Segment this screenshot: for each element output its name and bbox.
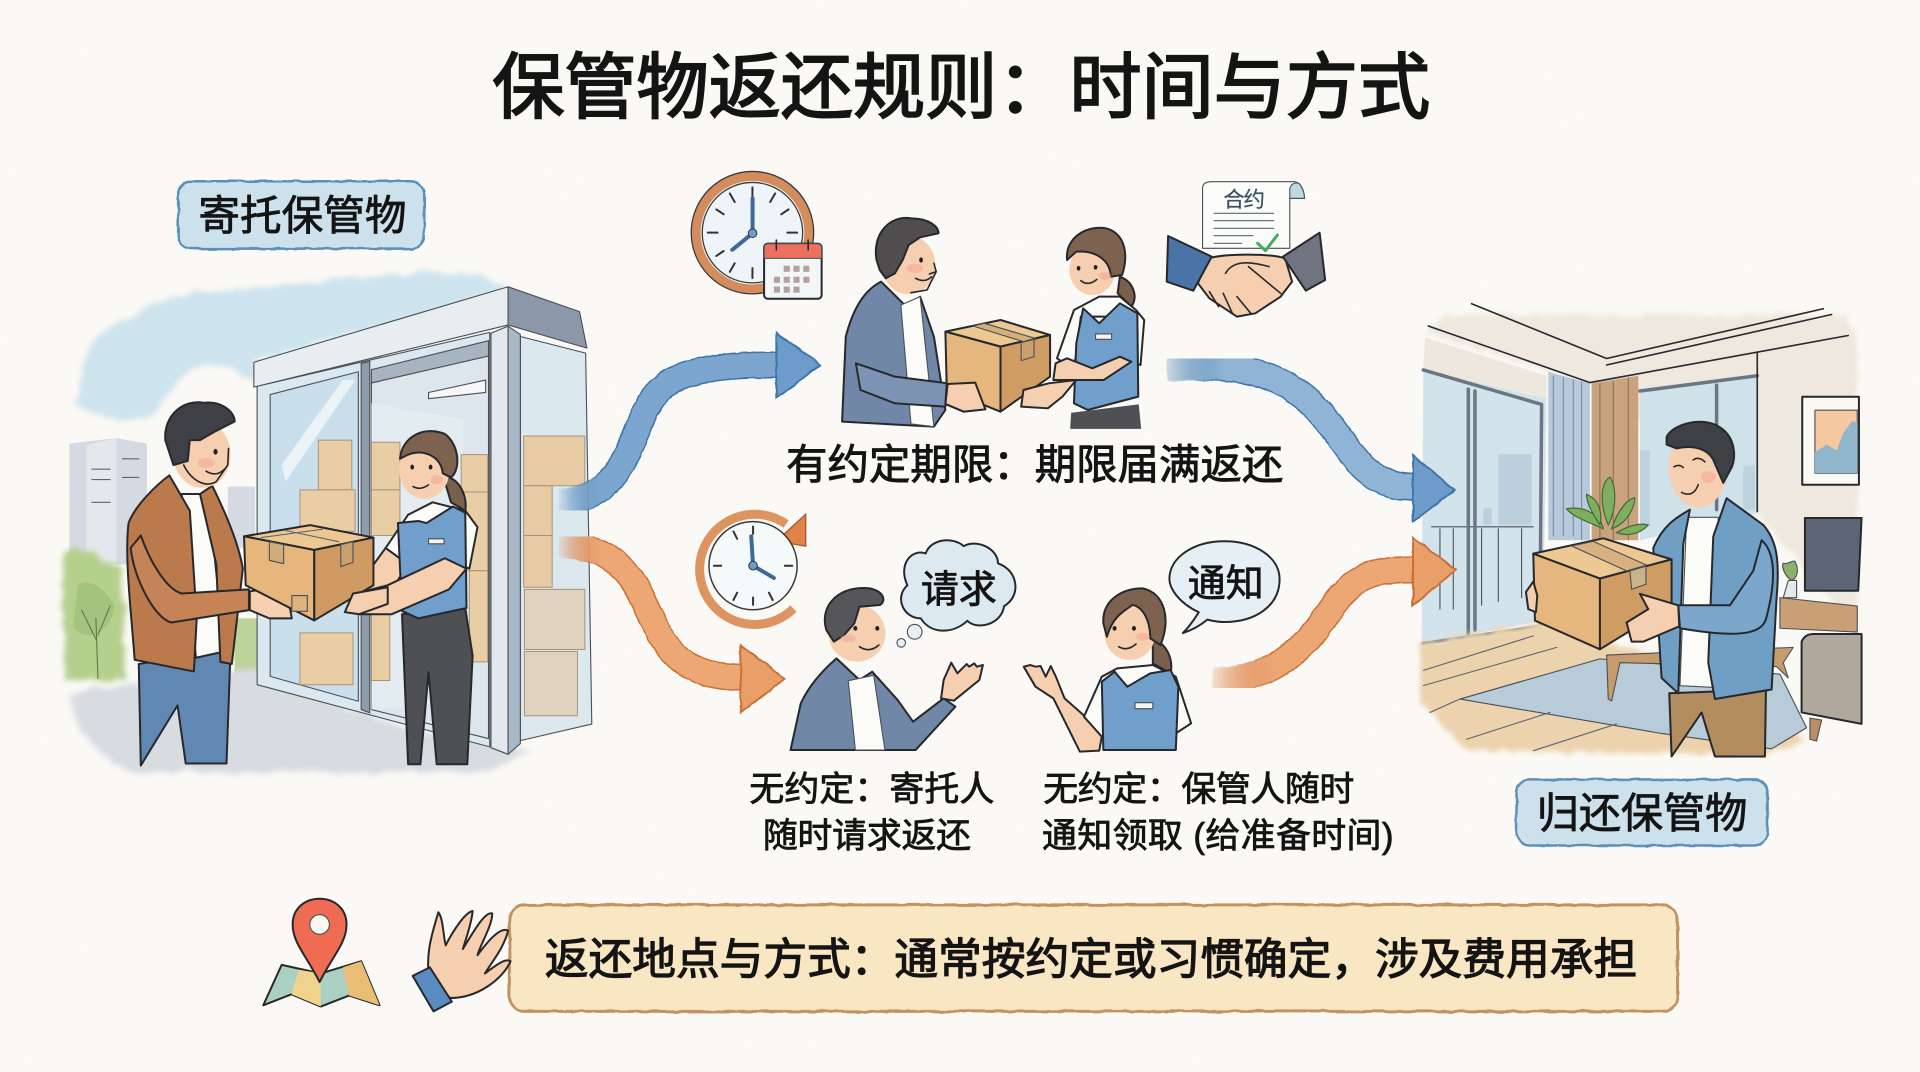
person: customer making request xyxy=(791,588,983,750)
background city and trees xyxy=(61,438,531,772)
cardboard box xyxy=(945,320,1050,412)
caption: with agreed term: 有约定期限：期限届满返还 xyxy=(786,442,1283,488)
stacked boxes in storage xyxy=(300,440,488,685)
cardboard box xyxy=(244,525,373,620)
callout: return place and method: 返还地点与方式：通常按约定或习惯确定，涉及费用承担 xyxy=(545,936,1637,985)
scene: no-agreement request and notice xyxy=(791,588,1191,752)
TV and furniture xyxy=(1607,518,1862,741)
caption: depositor may request anytime xyxy=(749,770,994,855)
person: customer in brown jacket xyxy=(127,402,292,766)
thought bubble: request xyxy=(897,540,1015,647)
title: 保管物返还规则：时间与方式 xyxy=(492,49,1430,129)
scene: handover with agreed term xyxy=(842,182,1325,428)
cardboard box xyxy=(1533,538,1672,649)
icon: map with location pin xyxy=(263,899,380,1007)
person: staff xyxy=(1053,228,1144,428)
hands on box xyxy=(1021,380,1076,408)
sky wash xyxy=(78,273,510,422)
scene: depositing the item at the storage facility xyxy=(61,273,592,772)
caption: custodian may notify anytime: 无约定：保管人随时 xyxy=(1043,770,1354,809)
hands on box xyxy=(1627,594,1679,642)
caption: depositor may request anytime: 随时请求返还 xyxy=(763,816,971,855)
icon: contract with handshake xyxy=(1167,182,1325,317)
callout: return place and method xyxy=(509,905,1678,1011)
hand over box xyxy=(345,587,388,614)
icon: clock and calendar xyxy=(691,171,822,299)
icon: open hand xyxy=(413,911,511,1011)
speech bubble: notice: 通知 xyxy=(1188,563,1264,605)
person: returning customer xyxy=(1653,422,1778,756)
badge: return xyxy=(1517,779,1768,846)
person: staff in blue vest xyxy=(351,431,478,764)
arrow: blue to agreed-term handover xyxy=(557,333,820,502)
person: staff giving notice xyxy=(1024,588,1191,752)
caption: custodian may notify anytime xyxy=(1042,770,1393,855)
room wash xyxy=(1420,304,1858,755)
speech bubble: notice xyxy=(1169,541,1280,633)
badge: deposit xyxy=(178,181,424,249)
arrow: orange to no-agreement request xyxy=(558,545,785,713)
caption: depositor may request anytime: 无约定：寄托人 xyxy=(749,770,994,809)
label: contract: 合约 xyxy=(1223,188,1265,212)
badge: return: 归还保管物 xyxy=(1537,790,1747,837)
badge: deposit: 寄托保管物 xyxy=(198,192,407,239)
person: customer xyxy=(842,218,985,427)
scene: returned item in living room xyxy=(1420,304,1862,756)
arrow: blue to returned item xyxy=(1167,367,1455,522)
thought bubble: request: 请求 xyxy=(921,569,997,611)
icon: clock with circular arrow xyxy=(700,514,806,624)
storage building xyxy=(254,287,592,754)
wall art xyxy=(1802,397,1859,485)
caption: custodian may notify anytime: 通知领取 (给准备时间) xyxy=(1042,816,1393,855)
arrow: orange to returned item xyxy=(1212,538,1456,681)
plant xyxy=(1567,477,1648,534)
